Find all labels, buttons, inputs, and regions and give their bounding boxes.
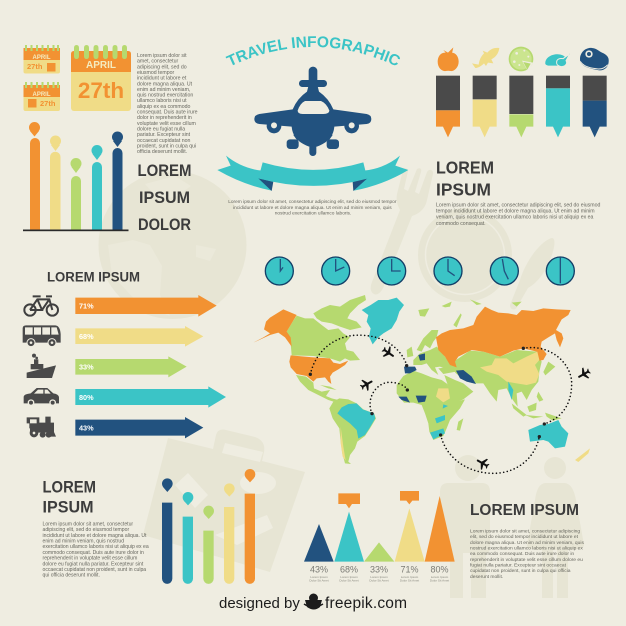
text block: bottom right: elit, sed do eiusmod tempor incididunt ut labore et xyxy=(470,534,579,540)
text block: top left paragraph: consequat. Duis aute irure xyxy=(137,110,198,116)
triangle chart labels: Dolor Sit Amet xyxy=(369,578,389,582)
text block: bottom right: Lorem ipsum dolor sit amet, consectetur adipiscing xyxy=(470,528,580,534)
text block: bottom right: reprehenderit in voluptate velit esse cillum dolore eu xyxy=(470,557,583,563)
food bar 4 xyxy=(546,76,570,137)
icon: bicycle xyxy=(24,296,58,316)
heading: bottom right: LOREM IPSUM xyxy=(470,502,579,519)
triangle chart labels: Lorem Ipsum xyxy=(310,575,328,579)
text block: top left paragraph: occaecat cupidatat non xyxy=(137,138,190,144)
region: new zealand xyxy=(575,448,590,462)
text block: bottom left: adipiscing elit, sed do eiusmod tempor xyxy=(42,527,129,533)
text block: under ribbon: incididunt ut labore et dolore magna aliqua. Ut enim ad minim veniam, quis xyxy=(233,205,392,211)
region: usa xyxy=(289,355,348,384)
text block: under ribbon: nostrud exercitation ullamco laboris. xyxy=(275,211,351,217)
watermark: suitcase xyxy=(143,430,305,572)
icon: apple xyxy=(438,47,459,71)
callout: 71% xyxy=(400,491,419,504)
text block: bottom left: reprehenderit in voluptate velit esse cillum xyxy=(42,556,137,562)
text block: top left paragraph: dolore eu fugiat nulla xyxy=(137,126,185,132)
text block: food panel: tempor incididunt ut labore et dolore magna aliqua. Ut enim ad minim xyxy=(436,209,595,215)
triangle chart labels xyxy=(309,564,449,582)
heading: transport: LOREM IPSUM xyxy=(47,270,140,284)
arrow: 33% xyxy=(75,356,187,377)
calendar: small bottom: 27th xyxy=(40,99,56,108)
region: sudan xyxy=(436,388,450,402)
icon: steak xyxy=(580,48,609,70)
clocks row xyxy=(265,257,574,285)
footer: designed by freepik: designed by xyxy=(219,595,300,612)
heading: lorem ipsum dolor: LOREM xyxy=(138,162,192,180)
heading: lorem ipsum dolor xyxy=(138,162,192,234)
food bar 3 xyxy=(509,76,533,137)
arrow labels: 68% xyxy=(79,332,94,341)
watermark: globe xyxy=(98,171,246,319)
region: brazil xyxy=(337,403,375,439)
heading: food panel: IPSUM xyxy=(436,180,491,200)
icon: freepik logo xyxy=(304,594,323,610)
arrow labels: 71% xyxy=(79,302,94,310)
triangle chart labels: Lorem Ipsum xyxy=(370,575,388,579)
dotted routes xyxy=(310,335,572,473)
text block: top left paragraph: proident, sunt in culpa qui xyxy=(137,143,196,149)
bar chart: top left pins xyxy=(23,122,128,231)
icon: bus xyxy=(23,325,61,347)
text block: top left paragraph: dolore magna aliqua. Ut xyxy=(137,81,193,87)
region: navy countries xyxy=(398,353,476,403)
arrow: 80% xyxy=(75,386,226,408)
calendar: small top: APRIL xyxy=(32,55,51,61)
heading: bottom left: IPSUM xyxy=(42,499,94,517)
arrow: 43% xyxy=(75,417,203,438)
text block: bottom left: occaecat cupidatat non proident, sunt in culpa xyxy=(42,567,146,573)
background watermark: travel silhouettes xyxy=(98,168,584,598)
text block: top left paragraph: quis nostrud exercitation xyxy=(137,93,193,99)
triangle chart labels: Dolor Sit Amet xyxy=(339,578,359,582)
calendars xyxy=(24,45,131,111)
icon: fish xyxy=(470,48,499,73)
icon: ship xyxy=(27,354,56,378)
text block: bottom left: dolore eu fugiat nulla pariatur. Excepteur sint xyxy=(42,561,144,567)
text block: bottom left: commodo consequat. Duis aute irure dolor in xyxy=(42,550,144,556)
watermark: plate xyxy=(418,208,512,302)
route endpoints xyxy=(309,347,546,438)
icon: small plane 4 xyxy=(474,455,491,472)
transport panel xyxy=(23,295,226,438)
region: africa, arabia and eurasia xyxy=(397,299,562,440)
text block: bottom left: Lorem ipsum dolor sit amet, consectetur xyxy=(42,522,133,528)
arrow labels xyxy=(79,302,94,432)
heading: food panel xyxy=(436,158,494,200)
food panel xyxy=(436,47,609,137)
triangle chart labels: 68% xyxy=(340,564,358,574)
text block: food panel: veniam, quis nostrud exercitation ullamco laboris nisi ut aliquip ex ea xyxy=(436,215,594,221)
triangle chart xyxy=(304,491,455,562)
text block: top left paragraph: pariatur. Excepteur sint xyxy=(137,132,191,138)
calendar: small bottom xyxy=(24,82,60,111)
heading: bottom left: LOREM xyxy=(42,479,96,497)
triangle chart labels: Dolor Sit Amet xyxy=(309,578,329,582)
arrow labels: 43% xyxy=(79,424,94,432)
text block: top left paragraph: Lorem ipsum dolor sit xyxy=(137,53,187,59)
watermark: woman xyxy=(527,457,584,598)
arrow: 68% xyxy=(75,326,203,347)
watermark: knife xyxy=(510,238,554,309)
calendar: large: 27th xyxy=(78,78,124,103)
calendar: small top: 27th xyxy=(27,62,43,71)
icon: train xyxy=(27,417,56,438)
footer: designed by freepik: freepik.com xyxy=(325,595,407,612)
text block: bottom right: fugiat nulla pariatur. Excepteur sint occaecat xyxy=(470,562,567,568)
region: greenland xyxy=(362,298,404,344)
text block: top left paragraph: officia deserunt mollit. xyxy=(137,149,187,155)
region: alaska xyxy=(253,309,297,347)
region: north america xyxy=(287,295,366,402)
calendar: small top xyxy=(24,45,60,74)
text block: bottom left: enim ad minim veniam, quis nostrud xyxy=(42,538,124,544)
text block: top left paragraph: enim ad minim veniam, xyxy=(137,87,190,93)
icon: airplane xyxy=(254,67,371,156)
calendar: large: APRIL xyxy=(86,60,116,71)
triangle chart labels: Lorem Ipsum xyxy=(340,575,358,579)
text block: bottom left: incididunt ut labore et dolore magna aliqua. Ut xyxy=(42,533,147,539)
icon: small plane 1 xyxy=(380,344,397,361)
arrow: 71% xyxy=(75,295,217,317)
heading: bottom left xyxy=(42,479,96,517)
callout: 68% xyxy=(338,493,360,508)
text block: top left paragraph: adipiscing elit, sed do xyxy=(137,64,187,70)
arrow labels: 33% xyxy=(79,362,94,372)
triangle chart labels: Lorem Ipsum xyxy=(401,575,419,579)
icon: small plane 3 xyxy=(575,366,592,383)
triangle chart labels: 71% xyxy=(400,564,419,574)
triangle chart labels: 33% xyxy=(370,564,388,574)
heading: lorem ipsum dolor: DOLOR xyxy=(138,216,191,234)
icon: car xyxy=(24,388,59,406)
watermark: man xyxy=(440,455,490,598)
calendar: small bottom: APRIL xyxy=(32,92,51,98)
text block: top left paragraph: ullamco laboris nisi ut xyxy=(137,98,187,104)
ribbon banner xyxy=(217,156,408,191)
region: chile xyxy=(341,427,346,461)
footer: designed by freepik xyxy=(219,594,407,612)
bar chart: bottom pins xyxy=(162,469,255,584)
text block: bottom left: qui officia deserunt mollit. xyxy=(42,573,100,579)
region: russia xyxy=(436,307,571,367)
text block: food panel: Lorem ipsum dolor sit amet, consectetur adipiscing elit, sed do eiusmod xyxy=(436,202,600,208)
region: south america xyxy=(329,398,376,464)
heading: lorem ipsum dolor: IPSUM xyxy=(139,189,190,207)
title on arc: TRAVEL INFOGRAPHIC xyxy=(226,36,400,66)
heading: food panel: LOREM xyxy=(436,158,494,178)
region: teal countries xyxy=(430,382,568,448)
text block: food panel: commodo consequat. xyxy=(436,221,486,227)
text block: bottom left: exercitation ullamco laboris nisi ut aliquip ex ea xyxy=(42,544,149,550)
triangle chart labels: Dolor Sit Amet xyxy=(430,578,449,582)
icon: small plane 2 xyxy=(358,376,375,393)
text block: under ribbon: Lorem ipsum dolor sit amet, consectetur adipiscing elit, sed do eiusmod tempor xyxy=(228,199,397,205)
calendar: large xyxy=(71,45,131,111)
text block: top left paragraph: amet, consectetur xyxy=(137,59,179,65)
text block: top left paragraph: incididunt ut labore et xyxy=(137,76,187,82)
text block: bottom right: ea commodo consequat. Duis aute irure dolor in xyxy=(470,551,574,557)
text block: top left paragraph: eiusmod tempor xyxy=(137,70,174,76)
food bar 5 xyxy=(583,76,607,137)
triangle chart labels: Lorem Ipsum xyxy=(431,575,449,579)
food bar 2 xyxy=(473,76,497,137)
triangle chart labels: 80% xyxy=(430,564,449,574)
text block: top left paragraph: aliquip ex ea commodo xyxy=(137,104,190,110)
triangle chart labels: Dolor Sit Amet xyxy=(400,578,419,582)
text block: bottom right: deserunt mollit. xyxy=(470,574,503,580)
text block: bottom right: cupidatat non proident, sunt in culpa qui officia xyxy=(470,568,571,574)
arrow labels: 80% xyxy=(79,393,94,402)
text block: top left paragraph: voluptate velit esse cillum xyxy=(137,121,196,127)
icon: pizza xyxy=(509,47,533,72)
triangle chart labels: 43% xyxy=(310,564,328,574)
icon: chicken xyxy=(545,53,571,67)
text block: top left paragraph: dolor in reprehenderit in xyxy=(137,115,192,121)
food bar 1 xyxy=(436,76,460,137)
text block: bottom right: dolore magna aliqua. Ut enim ad minim veniam, quis xyxy=(470,540,584,546)
region: china xyxy=(480,352,539,385)
text block: bottom right: nostrud exercitation ullamco laboris nisi ut aliquip ex xyxy=(470,546,583,552)
watermark: fork xyxy=(371,168,433,294)
world map xyxy=(253,295,592,473)
